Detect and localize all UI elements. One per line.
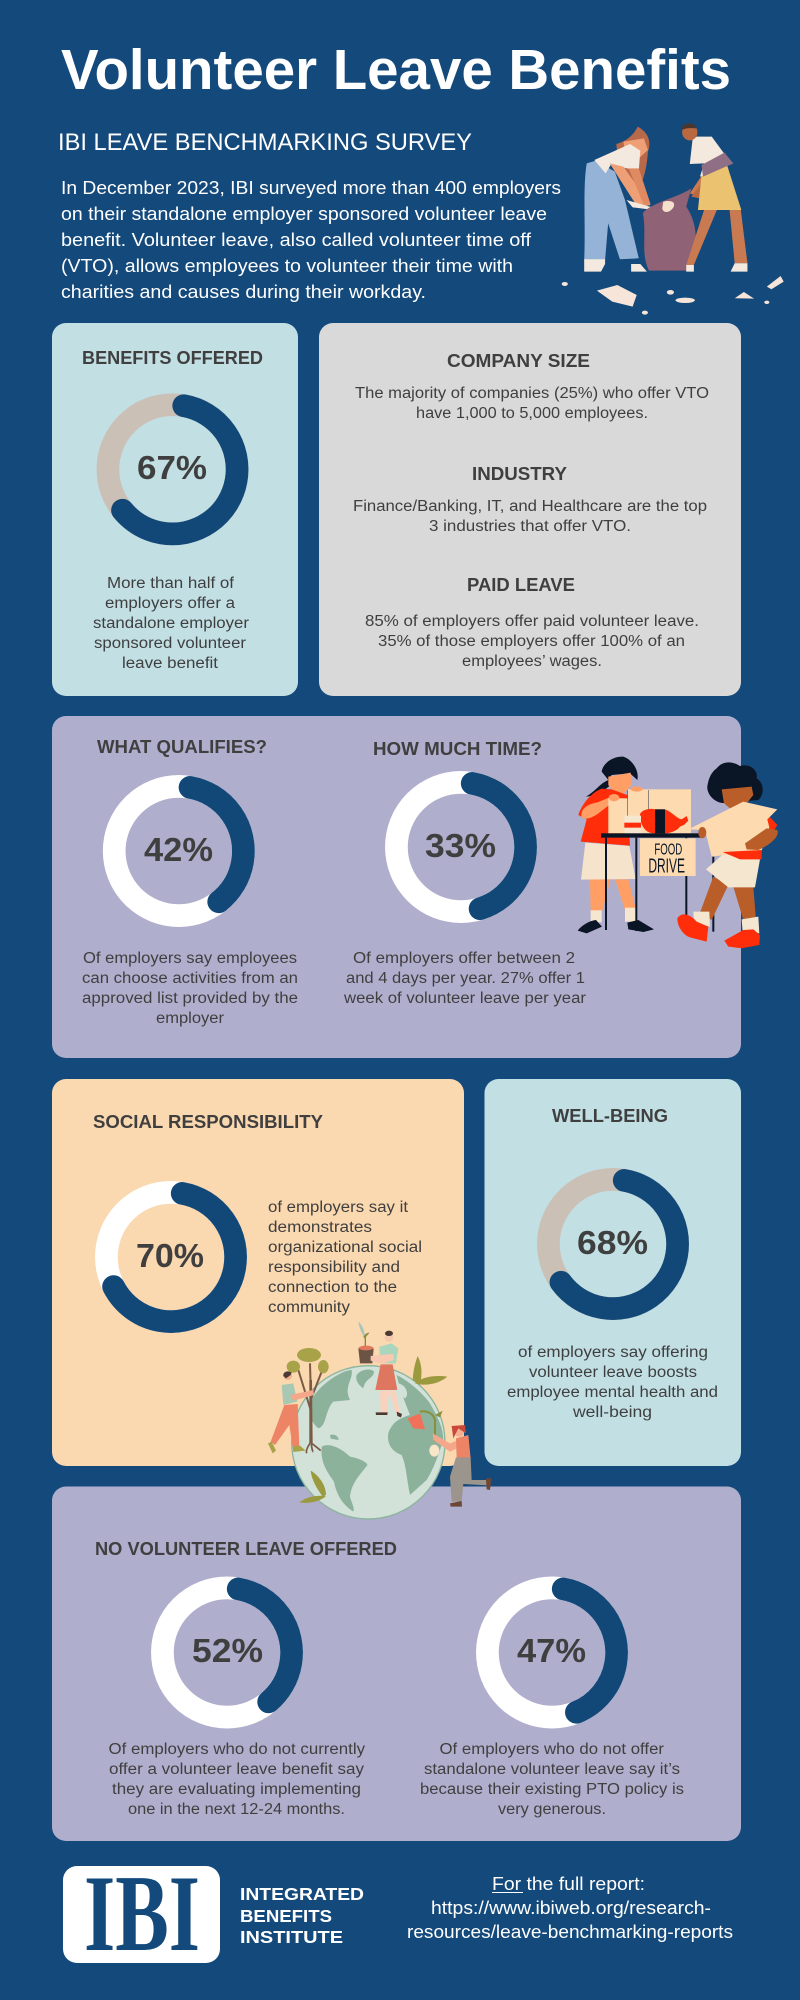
- description: well-being: [572, 1404, 652, 1421]
- description: generous PTO: because their existing PTO policy is: [420, 1781, 684, 1798]
- description: of employers say it: [268, 1199, 409, 1216]
- industry: [353, 463, 707, 535]
- description: employee mental health and: [507, 1384, 718, 1401]
- description: generous PTO: [420, 1741, 684, 1818]
- donut chart: 67%: 67%: [137, 449, 207, 486]
- donut chart: 47%: 47%: [517, 1632, 586, 1669]
- illustration: food drive volunteers: [578, 757, 778, 948]
- description: [268, 1199, 422, 1316]
- description: volunteer leave boosts: [529, 1364, 697, 1381]
- footer: full report link: https://www.ibiweb.org/research-: [431, 1898, 711, 1918]
- organisation name: INSTITUTE: [240, 1927, 343, 1947]
- what qualifies description: [82, 950, 298, 1027]
- company size: [355, 350, 709, 422]
- illustration: people planting around globe: [268, 1322, 492, 1519]
- what qualifies heading: WHAT QUALIFIES?: [97, 736, 267, 757]
- industry: Finance/Banking, IT, and Healthcare are the top: [353, 498, 707, 515]
- panel: company size, industry, paid leave: [319, 323, 741, 696]
- description: More than half of: [107, 575, 235, 592]
- heading: BENEFITS OFFERED: [82, 347, 263, 368]
- description: connection to the: [268, 1279, 397, 1296]
- donut chart: 52%: [152, 1578, 302, 1727]
- illustration: food drive volunteers: DRIVE: [648, 856, 685, 878]
- donut chart: 33%: 33%: [425, 827, 496, 864]
- donut chart: 47%: [477, 1578, 627, 1727]
- description: sponsored volunteer: [94, 635, 246, 652]
- description: evaluating: offer a volunteer leave benefit say: [109, 1761, 364, 1778]
- panel: no volunteer leave offered: [52, 1486, 741, 1841]
- donut chart: 70%: 70%: [136, 1237, 204, 1274]
- company size: The majority of companies (25%) who offer VTO: [355, 385, 709, 402]
- paid leave: PAID LEAVE: [467, 574, 575, 595]
- paid leave: employees’ wages.: [462, 653, 602, 670]
- intro paragraph: In December 2023, IBI surveyed more than 400 employers: [61, 177, 561, 198]
- description: evaluating: they are evaluating implementing: [112, 1781, 361, 1798]
- intro paragraph: on their standalone employer sponsored volunteer leave: [61, 203, 547, 224]
- heading: NO VOLUNTEER LEAVE OFFERED: [95, 1538, 397, 1559]
- description: generous PTO: Of employers who do not offer: [440, 1741, 664, 1758]
- company size: have 1,000 to 5,000 employees.: [416, 405, 648, 422]
- how much time description: week of volunteer leave per year: [343, 990, 586, 1007]
- donut chart: 33%: [386, 772, 536, 922]
- description: organizational social: [268, 1239, 422, 1256]
- how much time description: Of employers offer between 2: [353, 950, 575, 967]
- how much time description: and 4 days per year. 27% offer 1: [346, 970, 585, 987]
- description: community: [268, 1299, 350, 1316]
- donut chart: 52%: 52%: [192, 1632, 263, 1669]
- description: generous PTO: standalone volunteer leave say it’s: [424, 1761, 680, 1778]
- description: evaluating: Of employers who do not currently: [108, 1741, 365, 1758]
- intro paragraph: benefit. Volunteer leave, also called volunteer time off: [61, 229, 532, 250]
- paid leave: 35% of those employers offer 100% of an: [378, 633, 685, 650]
- intro paragraph: charities and causes during their workday.: [61, 281, 426, 302]
- company size: COMPANY SIZE: [447, 350, 590, 371]
- subtitle: IBI LEAVE BENCHMARKING SURVEY: [58, 129, 472, 156]
- donut chart: 68%: [538, 1169, 688, 1319]
- panel: well-being: [484, 1079, 741, 1466]
- intro paragraph: (VTO), allows employees to volunteer their time with: [61, 255, 513, 276]
- organisation name: BENEFITS: [240, 1906, 332, 1926]
- description: [507, 1344, 718, 1421]
- description: demonstrates: [268, 1219, 372, 1236]
- panel: social responsibility: [52, 1079, 464, 1466]
- what qualifies description: Of employers say employees: [83, 950, 297, 967]
- industry: INDUSTRY: [472, 463, 568, 484]
- description: [93, 575, 249, 672]
- what qualifies description: employer: [156, 1010, 224, 1027]
- footer: full report link: [407, 1874, 733, 1942]
- what qualifies description: can choose activities from an: [82, 970, 298, 987]
- paid leave: [365, 574, 699, 670]
- intro paragraph: [61, 177, 561, 302]
- description: standalone employer: [93, 615, 249, 632]
- donut chart: 67%: [98, 394, 247, 544]
- what qualifies description: approved list provided by the: [82, 990, 298, 1007]
- header: title and intro: [58, 38, 731, 302]
- donut chart: 70%: [96, 1182, 246, 1332]
- illustration: food drive volunteers: FOOD: [654, 842, 682, 859]
- organisation name: [240, 1884, 364, 1947]
- organisation name: INTEGRATED: [240, 1884, 364, 1904]
- logo letters: IBI: [84, 1853, 200, 1974]
- description: employers offer a: [105, 595, 235, 612]
- footer: logo: [63, 1853, 364, 1974]
- description: generous PTO: very generous.: [498, 1801, 606, 1818]
- heading: WELL-BEING: [552, 1105, 668, 1126]
- panel: benefits offered: [52, 323, 298, 696]
- donut chart: 68%: 68%: [577, 1224, 648, 1261]
- title: Volunteer Leave Benefits: [61, 38, 731, 102]
- footer: full report link: For the full report:: [492, 1874, 645, 1894]
- industry: 3 industries that offer VTO.: [429, 518, 631, 535]
- description: of employers say offering: [518, 1344, 708, 1361]
- donut chart: 42%: 42%: [144, 831, 213, 868]
- illustration: volunteers collecting litter: [562, 123, 784, 315]
- donut chart: 42%: [104, 776, 254, 926]
- description: responsibility and: [268, 1259, 400, 1276]
- logo box: [63, 1866, 220, 1963]
- description: evaluating: [108, 1741, 365, 1818]
- how much time description: [343, 950, 586, 1007]
- paid leave: 85% of employers offer paid volunteer leave.: [365, 613, 699, 630]
- footer: full report link: resources/leave-benchmarking-reports: [407, 1922, 733, 1942]
- how much time heading: HOW MUCH TIME?: [373, 738, 542, 759]
- description: leave benefit: [122, 655, 219, 672]
- heading: SOCIAL RESPONSIBILITY: [93, 1111, 324, 1132]
- description: evaluating: one in the next 12-24 months.: [128, 1801, 345, 1818]
- panel: what qualifies and how much time: [52, 716, 741, 1058]
